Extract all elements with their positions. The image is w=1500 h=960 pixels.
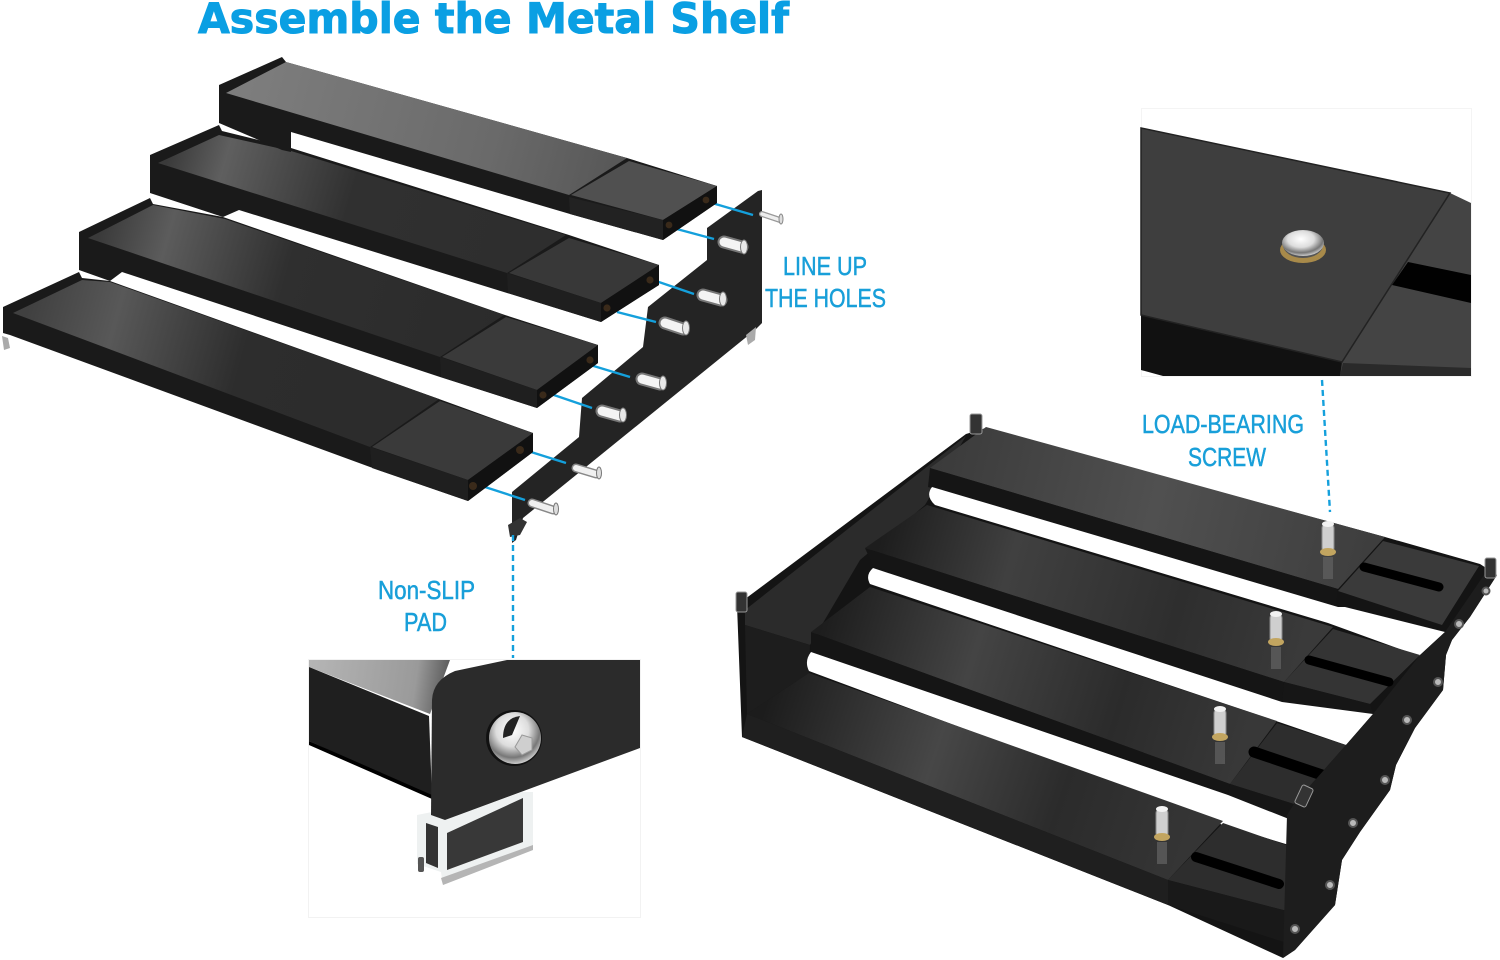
side panel with stair profile xyxy=(1283,572,1497,958)
screw head with brass washer xyxy=(1280,230,1326,263)
label: load-bearing screw: LOAD-BEARING xyxy=(1142,409,1304,439)
non-slip pad clip xyxy=(417,792,533,885)
tier 2 shelf xyxy=(79,198,598,408)
white gap 1 xyxy=(929,487,1445,656)
inset: load-bearing screw close-up xyxy=(1141,108,1472,376)
tier 3 shelf xyxy=(150,125,659,322)
shelf surface and front xyxy=(309,660,450,799)
tier 4 shelf (top) xyxy=(219,57,717,240)
upright screws xyxy=(1154,521,1336,864)
white gap 3 xyxy=(807,652,1294,845)
third tier plate xyxy=(811,587,1346,821)
second tier plate xyxy=(865,505,1420,714)
label: line up the holes: THE HOLES xyxy=(765,283,886,313)
label: line up the holes xyxy=(765,251,886,313)
label: non-slip pad: Non-SLIP xyxy=(378,575,475,605)
label: load-bearing screw: SCREW xyxy=(1188,442,1266,472)
white gap 2 xyxy=(868,568,1373,745)
top tier plate xyxy=(928,427,1479,625)
chrome screw head xyxy=(486,710,542,766)
plate surfaces and front xyxy=(1141,128,1471,376)
label: line up the holes: LINE UP xyxy=(783,251,867,281)
end plate xyxy=(431,660,640,820)
dashed leader to load-bearing screw xyxy=(1322,380,1330,512)
tier 1 shelf (bottom) xyxy=(2,272,533,501)
label: non-slip pad: PAD xyxy=(404,607,447,637)
side panel: stair profile bracket xyxy=(508,190,762,543)
rear panel highlights xyxy=(745,436,966,714)
black silhouette with rear and side panels xyxy=(737,428,1497,958)
bottom tier plate xyxy=(742,673,1289,943)
left exploded shelf diagram xyxy=(2,57,783,543)
label: non-slip pad xyxy=(378,575,475,637)
side panel screw heads xyxy=(1291,588,1490,933)
inset: non-slip pad close-up xyxy=(308,660,640,918)
pad clips xyxy=(736,414,1496,808)
screws on side panel xyxy=(532,214,783,515)
dashed leader to non-slip pad xyxy=(512,535,514,658)
label: load-bearing screw xyxy=(1142,409,1304,472)
blue alignment lines xyxy=(485,203,753,500)
right assembled shelf diagram xyxy=(736,414,1497,958)
